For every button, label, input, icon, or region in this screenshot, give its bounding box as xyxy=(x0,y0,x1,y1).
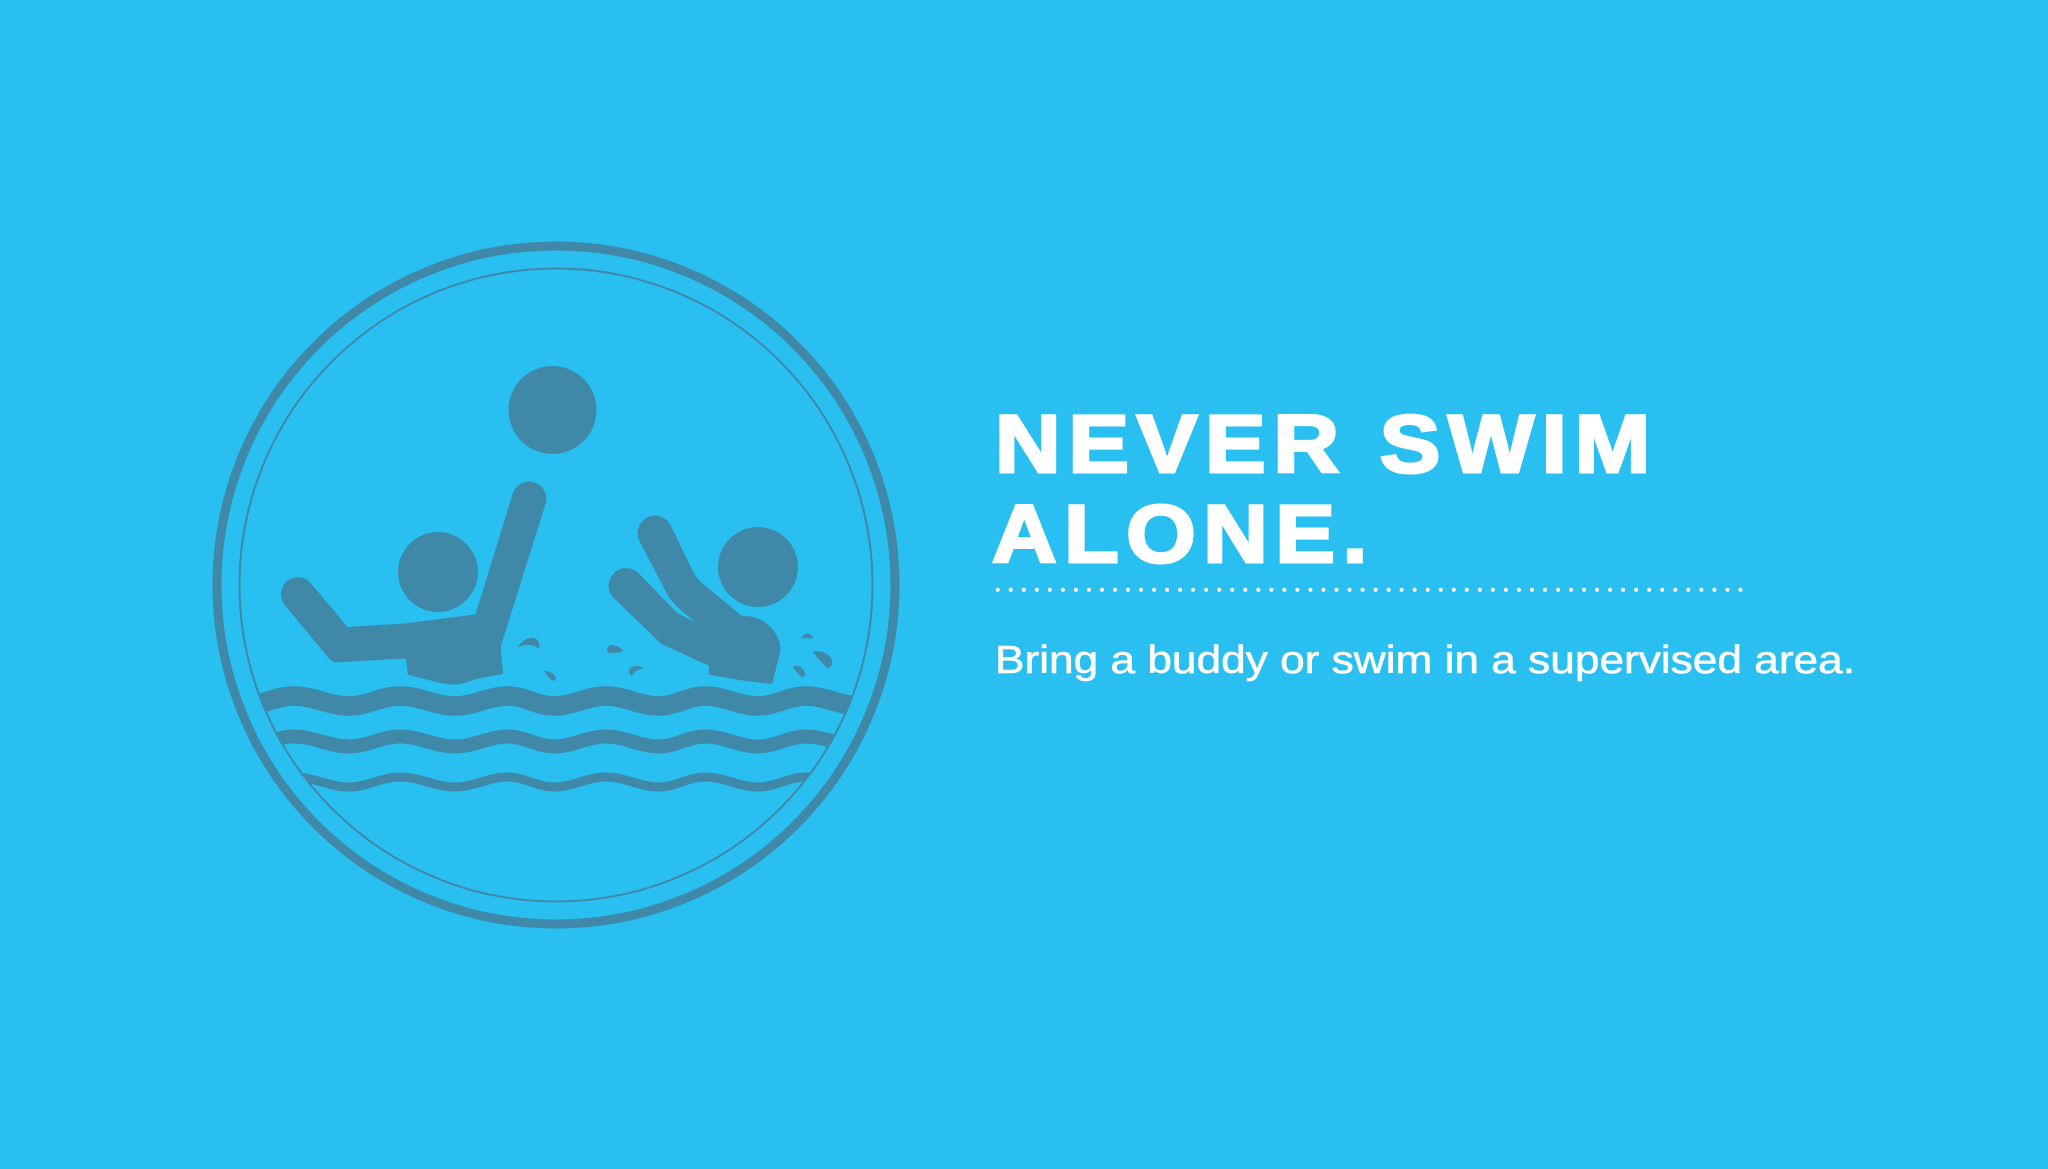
subtitle text: Bring a buddy or swim in a supervised area. xyxy=(995,639,1855,682)
icon: swimmers badge xyxy=(190,246,895,924)
right swimmer xyxy=(609,516,798,683)
dotted divider xyxy=(998,588,1742,592)
water waves xyxy=(190,696,860,787)
ball xyxy=(508,366,596,454)
badge inner ring xyxy=(240,268,872,902)
title xyxy=(992,399,1658,580)
water splashes xyxy=(517,634,832,681)
title line 1: NEVER SWIM xyxy=(995,399,1658,490)
left swimmer xyxy=(282,482,546,684)
badge outer ring xyxy=(217,246,895,924)
title line 2: ALONE. xyxy=(992,489,1375,580)
infographic canvas xyxy=(212,242,1852,928)
